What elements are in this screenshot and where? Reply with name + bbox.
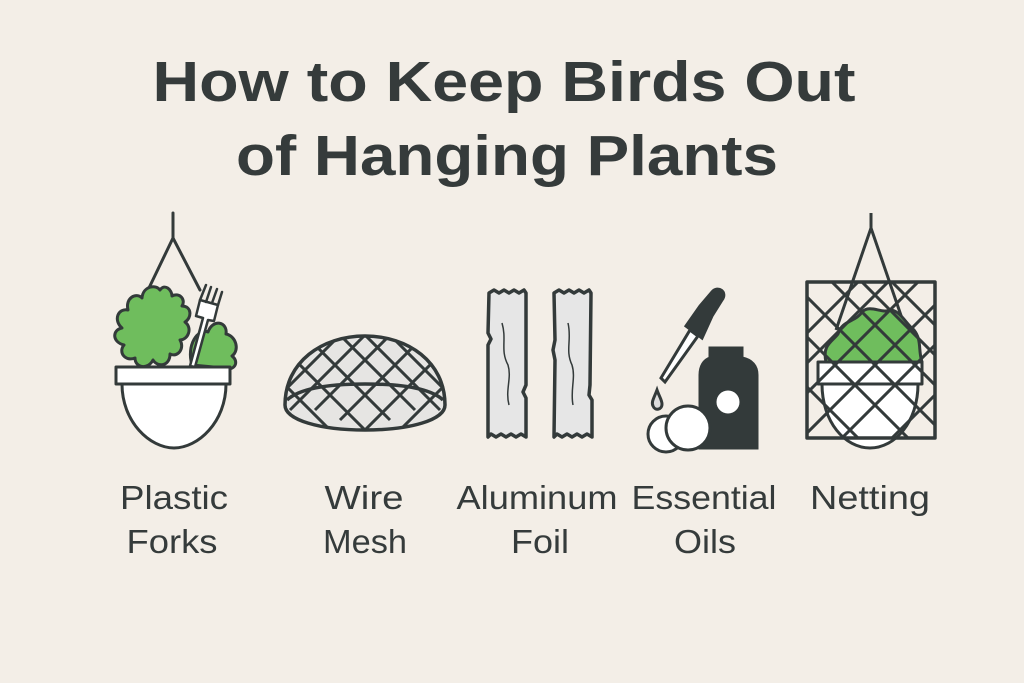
- label: aluminum foil: Aluminum: [456, 479, 618, 516]
- label: plastic forks: Plastic: [120, 479, 228, 516]
- icon: hanging plant with plastic forks: [115, 213, 236, 448]
- title: [152, 50, 856, 188]
- label: aluminum foil: [456, 479, 618, 560]
- label: wire mesh: Wire: [324, 479, 404, 516]
- label: aluminum foil: Foil: [511, 523, 569, 560]
- icon: aluminum foil strips: [488, 290, 592, 437]
- label: essential oils: Essential: [632, 479, 776, 516]
- label: essential oils: Oils: [674, 523, 736, 560]
- label: plastic forks: Forks: [126, 523, 218, 560]
- icon: wire mesh dome: [283, 334, 447, 432]
- icon: essential oils dropper and bottle: [648, 289, 757, 452]
- title: How to Keep Birds Out: [152, 50, 856, 114]
- label: netting: Netting: [810, 479, 930, 516]
- label: wire mesh: Mesh: [323, 523, 407, 560]
- title: of Hanging Plants: [236, 124, 778, 188]
- label: essential oils: [632, 479, 776, 560]
- label: wire mesh: [323, 479, 407, 560]
- label: plastic forks: [120, 479, 228, 560]
- icon: netting over hanging plant: [805, 213, 937, 450]
